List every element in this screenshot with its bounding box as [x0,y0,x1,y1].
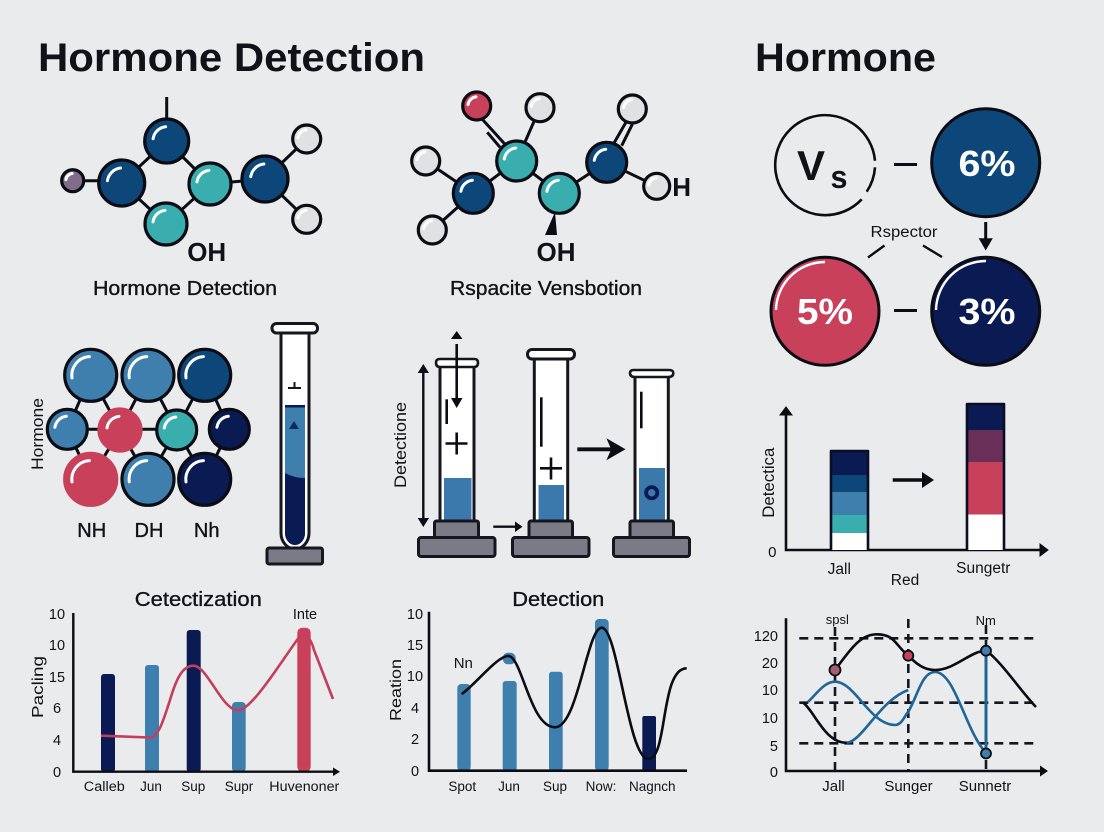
x axis labels: Jun [140,779,162,794]
arrow: large [577,440,624,458]
atom: red [463,92,491,120]
circle: 6%: 6% [958,143,1016,184]
black curves [803,634,1036,743]
label: Reation rotated: Reation [388,659,405,721]
bars [457,619,656,771]
connectors: Rspector [868,246,942,258]
atom: row three dark [179,453,231,505]
y axis labels: 15 [407,638,423,654]
atom: white top right [618,95,646,123]
y axis labels: 5 [770,739,778,755]
atom: white bottom [293,205,321,233]
atom: navy far right [242,156,288,202]
atom: white top middle [526,94,554,122]
blue curves [808,651,986,753]
label: Nm: Nm [976,613,996,628]
label: OH lower: OH [536,237,576,267]
atom: navy left [453,173,493,213]
atom: row two red [99,409,141,451]
label: OH: OH [187,237,226,267]
y axis labels: 0 [53,765,61,781]
panel: molecule one [62,97,321,267]
y axis labels: 0 [411,764,419,780]
y axis labels: 20 [762,656,778,672]
x axis labels: Nagnch [629,779,676,794]
label: Rspector: Rspector [870,224,938,241]
heading: Detection: Detection [512,589,604,611]
atom: row two dark [209,409,249,449]
atom: teal lower [539,173,579,213]
label: Inte: Inte [293,607,317,623]
axes [429,612,687,771]
arrow: between stacks [893,472,934,488]
x axis labels: Calleb [84,779,125,794]
label: Pacling rotated: Pacling [30,656,47,718]
x axis labels: Now: [586,779,616,794]
circle: Vs: s [830,159,848,195]
title: Hormone: Hormone [755,36,936,80]
panel: stacked bars [759,404,1048,589]
y axis labels: 0 [770,765,778,781]
x axis labels: Supr [225,779,254,794]
y axis labels: 120 [754,629,778,645]
x axis labels [822,778,1011,795]
caption: Rspacite Vensbotion: Rspacite Vensbotion [450,278,642,300]
label: DH: DH [135,520,163,542]
y axis labels [754,629,778,781]
black curve [462,628,687,759]
y axis labels: 10 [762,683,778,699]
atom: navy top [145,119,189,163]
label: Hormone rotated: Hormone [28,398,47,470]
atom: navy right [587,142,627,182]
label: Detectione rotated: Detectione [391,402,410,488]
arrow: small [493,522,522,532]
bars [101,628,311,772]
y axis labels: 15 [49,670,65,686]
panel: three test tubes [391,331,690,556]
x axis labels: Sunger [884,778,933,795]
tube two [512,350,589,556]
y axis labels: 4 [53,733,61,749]
atom: white top [293,125,321,153]
arrow: 6% to 3% [980,222,992,249]
panel: single test tube [267,324,322,564]
x axis labels: Sunnetr [959,778,1011,795]
y axis labels: 10 [762,711,778,727]
y axis labels: 10 [49,638,65,654]
title: Hormone Detection: Hormone Detection [38,36,425,80]
atom: teal upper [497,141,537,181]
connector: Vs to 6% [894,163,917,166]
tube three [614,370,690,556]
axes [73,613,340,776]
circle: 6% [932,109,1040,217]
data nodes [830,646,991,758]
y axis labels: 2 [411,732,419,748]
tube one [418,331,495,556]
caption: Hormone Detection: Hormone Detection [93,278,277,300]
circle: 3%: 3% [958,291,1016,332]
panel: molecule two [412,92,691,267]
x axis labels [84,779,340,794]
atom: row three blue [122,453,174,505]
chart: Cetectization bars and line [30,589,340,794]
circle: Vs: V [797,142,825,189]
label: H: H [672,172,691,202]
y axis labels [407,607,423,780]
x axis labels: Jall [822,778,845,795]
atom: purple [62,170,84,192]
label: Jall: Jall [828,561,851,578]
atom: teal bottom [145,203,187,245]
stacked bar: Sungetr [967,404,1004,550]
y axis labels: 10 [407,607,423,623]
x axis labels: Jun [498,779,520,794]
circle: 3% [932,257,1040,365]
connector: 5% to 3% [894,309,917,312]
label: Detectica rotated: Detectica [759,447,778,518]
stacked bar: Jall [831,450,868,550]
atom: row two teal [157,410,197,450]
heading: Cetectization: Cetectization [135,589,262,611]
red trend line [101,634,333,738]
label: NH: NH [77,520,106,542]
circle: 5%: 5% [797,291,853,332]
circle: Vs [775,115,875,215]
atom: row one left [65,349,117,401]
panel: percentage circles [771,109,1040,365]
atom: row three red [65,453,117,505]
y axis labels [49,607,65,781]
x axis labels: Sup [543,779,567,794]
wedge bond [545,212,557,235]
x axis labels [448,779,676,794]
x axis labels: Spot [448,779,476,794]
atom: white lower left [418,216,446,244]
x axis labels: Sup [181,779,205,794]
chart: Detection bars and curve [388,589,687,794]
atom: row one right [179,349,231,401]
atom: teal right [189,163,231,205]
atom: white left [412,147,440,175]
label: spsl: spsl [826,612,849,627]
label: zero: 0 [768,544,776,561]
atom: white right [644,173,670,199]
y axis labels: 10 [49,607,65,623]
axes [786,618,1048,776]
atom: navy left [99,160,145,206]
panel: atom lattice [28,349,249,542]
dashed guides [799,619,1038,771]
atom: row one middle [122,349,174,401]
atom: row two blue [47,409,87,449]
y axis labels: 6 [53,701,61,717]
axes [780,407,1048,556]
chart: line chart with nodes [754,612,1048,795]
x axis labels: Huvenoner [269,779,340,794]
circle: 5% [771,257,879,365]
y axis labels: 4 [411,701,419,717]
label: Nh: Nh [194,520,219,542]
label: Nn: Nn [454,655,473,672]
label: Sungetr: Sungetr [956,560,1010,577]
y axis labels: 10 [407,669,423,685]
label: Red: Red [891,572,919,589]
